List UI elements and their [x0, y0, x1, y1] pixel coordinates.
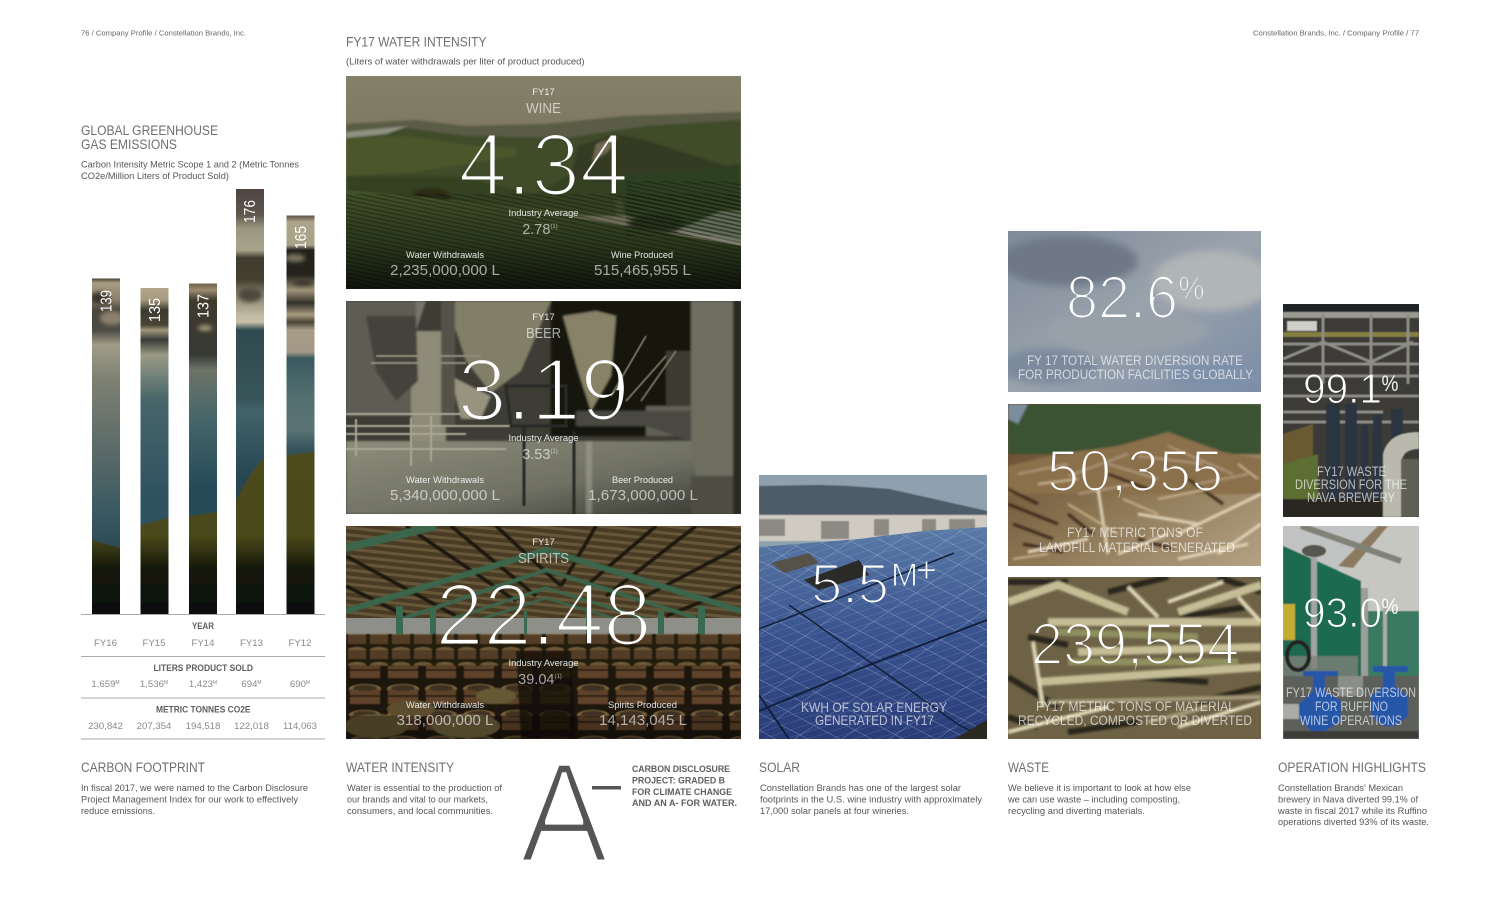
section: waste [1007, 760, 1191, 817]
landfill text [1039, 439, 1235, 555]
panel: ruffino [1283, 526, 1419, 739]
diversion rate text: % [1178, 270, 1204, 306]
section: waste: WASTE [1008, 760, 1049, 775]
grade: A-: – [592, 755, 621, 813]
section: water intensity: our brands and vital to our markets, [347, 794, 488, 806]
bar value labels [98, 200, 310, 322]
diversion rate text: FY 17 TOTAL WATER DIVERSION RATE [1027, 353, 1243, 368]
beer text: 3.19 [458, 340, 630, 439]
recycled text: FY17 METRIC TONS OF MATERIAL [1036, 699, 1235, 714]
running header left: 76 / Company Profile / Constellation Brands, Inc. [81, 30, 246, 38]
landfill text: FY17 METRIC TONS OF [1067, 525, 1203, 540]
data table under chart: FY14 [192, 638, 215, 649]
solar caption [801, 700, 947, 728]
wine text: FY17 [532, 86, 555, 97]
solar text: + [916, 549, 937, 590]
panel: nava brewery [1283, 304, 1419, 517]
nava text: 99.1 [1303, 365, 1382, 412]
diversion rate text: 82.6 [1066, 264, 1178, 331]
heading: global greenhouse gas emissions [81, 123, 218, 152]
data table under chart: 207,354 [137, 721, 172, 732]
solar caption: KWH OF SOLAR ENERGY [801, 700, 947, 715]
data table under chart: 694 [241, 679, 257, 690]
chart subtitle: CO2e/Million Liters of Product Sold) [81, 171, 229, 182]
data table under chart: LITERS PRODUCT SOLD [154, 663, 253, 673]
spirits text: Spirits Produced [608, 699, 677, 710]
bar chart: carbon intensity [85, 189, 320, 620]
beer text: Industry Average [508, 432, 578, 443]
ruffino text: WINE OPERATIONS [1300, 713, 1402, 728]
bar value labels: 176 [242, 200, 259, 223]
section: operation highlights [1277, 760, 1429, 828]
recycled text: 239,554 [1031, 612, 1239, 677]
heading: global greenhouse gas emissions: GLOBAL GREENHOUSE [81, 123, 218, 138]
solar text: M [891, 557, 918, 593]
section: carbon footprint: reduce emissions. [81, 806, 155, 817]
section: waste: recycling and diverting materials. [1008, 806, 1145, 817]
ruffino text [1286, 589, 1416, 728]
data table under chart: FY16 [94, 638, 117, 649]
section: waste: we can use waste – including composting, [1007, 794, 1180, 806]
wine text: WINE [526, 101, 561, 117]
spirits text: 39.04 [518, 672, 554, 688]
ruffino text: % [1382, 594, 1398, 619]
diversion rate text: FOR PRODUCTION FACILITIES GLOBALLY [1018, 367, 1253, 382]
spirits text: (1) [554, 674, 562, 680]
data table under chart: 1,423 [189, 679, 213, 690]
nava text: NAVA BREWERY [1307, 490, 1395, 505]
spirits text: SPIRITS [518, 551, 569, 567]
heading: global greenhouse gas emissions: GAS EMISSIONS [81, 137, 177, 152]
data table under chart: M [257, 680, 262, 686]
bar value labels: 135 [147, 298, 164, 322]
section: operation highlights: brewery in Nava diverted 99.1% of [1278, 794, 1418, 806]
beer text: Water Withdrawals [406, 474, 484, 485]
spirits text: 14,143,045 L [599, 713, 687, 729]
data table under chart: 114,063 [283, 721, 317, 732]
beer text [390, 311, 698, 504]
section: water intensity: WATER INTENSITY [346, 760, 454, 775]
spirits text [396, 536, 687, 729]
data table under chart: FY12 [289, 638, 311, 649]
recycled text: RECYCLED, COMPOSTED OR DIVERTED [1018, 713, 1252, 728]
panel: recycled material [1008, 577, 1261, 739]
ruffino text: FOR RUFFINO [1315, 699, 1388, 714]
data table under chart: FY13 [240, 638, 263, 649]
landfill text: LANDFILL MATERIAL GENERATED [1039, 540, 1235, 555]
grade: A-: A [520, 734, 609, 892]
beer text: FY17 [532, 311, 555, 322]
nava text: FY17 WASTE [1317, 464, 1386, 479]
beer text: Beer Produced [612, 474, 673, 485]
data table under chart: 1,659 [91, 679, 115, 690]
data table under chart: M [213, 680, 217, 686]
panel: water diversion rate [998, 231, 1273, 392]
bar value labels: 165 [293, 226, 310, 249]
callout: carbon disclosure project: FOR CLIMATE CHANGE [632, 787, 732, 797]
callout: carbon disclosure project: CARBON DISCLOSURE [632, 764, 730, 774]
panel: spirits [344, 526, 741, 739]
data table under chart: M [164, 680, 168, 686]
landfill text: 50,355 [1047, 439, 1223, 504]
data table under chart: M [115, 680, 120, 686]
data table under chart: 122,018 [234, 721, 269, 732]
solar text [811, 549, 937, 615]
section: operation highlights: waste in fiscal 2017 while its Ruffino [1277, 806, 1427, 817]
data table under chart: YEAR [192, 621, 214, 631]
section: carbon footprint: Project Management Index for our work to effectively [81, 794, 298, 806]
spirits text: Industry Average [508, 657, 578, 668]
data table under chart: 230,842 [88, 721, 123, 732]
beer text: 1,673,000,000 L [588, 488, 698, 504]
section: solar: Constellation Brands has one of the largest solar [760, 783, 962, 794]
wine text: Wine Produced [611, 249, 673, 260]
section: solar: footprints in the U.S. wine industry with approximately [760, 794, 982, 806]
section: solar [759, 760, 982, 817]
callout: carbon disclosure project: AND AN A- FOR WATER. [632, 798, 737, 808]
section: water intensity [346, 760, 502, 817]
running header right: Constellation Brands, Inc. / Company Profile / 77 [1253, 30, 1419, 38]
wine text: Water Withdrawals [406, 249, 484, 260]
section: carbon footprint: In fiscal 2017, we were named to the Carbon Disclosure [81, 783, 308, 794]
heading: water intensity: FY17 WATER INTENSITY [346, 34, 486, 50]
section: operation highlights: OPERATION HIGHLIGHTS [1278, 760, 1426, 775]
solar caption: GENERATED IN FY17 [815, 713, 934, 728]
section: operation highlights: operations diverted 93% of its waste. [1278, 817, 1429, 828]
wine text: 2.78 [522, 222, 550, 238]
wine text: (1) [550, 224, 558, 230]
chart subtitle [81, 160, 299, 182]
section: carbon footprint: CARBON FOOTPRINT [81, 760, 205, 775]
callout: carbon disclosure project: PROJECT: GRADED B [632, 776, 725, 786]
recycled text [1018, 612, 1252, 728]
spirits text: Water Withdrawals [406, 699, 484, 710]
data table under chart: 690 [290, 679, 306, 690]
wine text [390, 86, 691, 279]
bar value labels: 137 [196, 294, 212, 318]
data table under chart [81, 614, 325, 739]
wine text: Industry Average [508, 207, 578, 218]
data table under chart: METRIC TONNES CO2E [156, 704, 250, 714]
nava text: DIVERSION FOR THE [1295, 477, 1407, 492]
nava text [1295, 365, 1407, 505]
nava text: % [1382, 371, 1398, 396]
ruffino text: FY17 WASTE DIVERSION [1286, 685, 1416, 700]
wine text: 515,465,955 L [594, 263, 691, 279]
beer text: 5,340,000,000 L [390, 488, 500, 504]
bar value labels: 139 [98, 290, 116, 312]
data table under chart: M [306, 680, 310, 686]
spirits text: FY17 [532, 536, 555, 547]
wine text: 4.34 [458, 115, 628, 214]
panel: wine [346, 76, 741, 289]
solar text: 5.5 [811, 552, 889, 615]
water intensity subtitle: (Liters of water withdrawals per liter of product produced) [346, 56, 584, 68]
spirits text: 318,000,000 L [396, 713, 494, 729]
beer text: BEER [526, 326, 561, 342]
panel: beer [346, 301, 741, 514]
section: operation highlights: Constellation Brands' Mexican [1278, 783, 1403, 794]
section: solar: SOLAR [759, 760, 800, 775]
wine text: 2,235,000,000 L [390, 263, 500, 279]
beer text: 3.53 [522, 447, 550, 463]
ruffino text: 93.0 [1303, 589, 1382, 636]
callout: carbon disclosure project [632, 764, 737, 808]
section: waste: We believe it is important to look at how else [1008, 783, 1191, 794]
panel: solar [759, 475, 987, 739]
data table under chart: FY15 [143, 638, 165, 649]
chart subtitle: Carbon Intensity Metric Scope 1 and 2 (Metric Tonnes [81, 160, 299, 170]
diversion rate text [1018, 264, 1253, 382]
data table under chart: 1,536 [140, 679, 164, 690]
spirits text: 22.48 [436, 565, 652, 664]
section: carbon footprint [81, 760, 308, 817]
beer text: (1) [550, 449, 558, 455]
section: solar: 17,000 solar panels at four wineries. [760, 806, 909, 817]
panel: landfill material [1008, 404, 1261, 566]
section: water intensity: Water is essential to the production of [347, 783, 502, 794]
section: water intensity: consumers, and local communities. [347, 806, 493, 817]
data table under chart: 194,518 [186, 721, 220, 732]
